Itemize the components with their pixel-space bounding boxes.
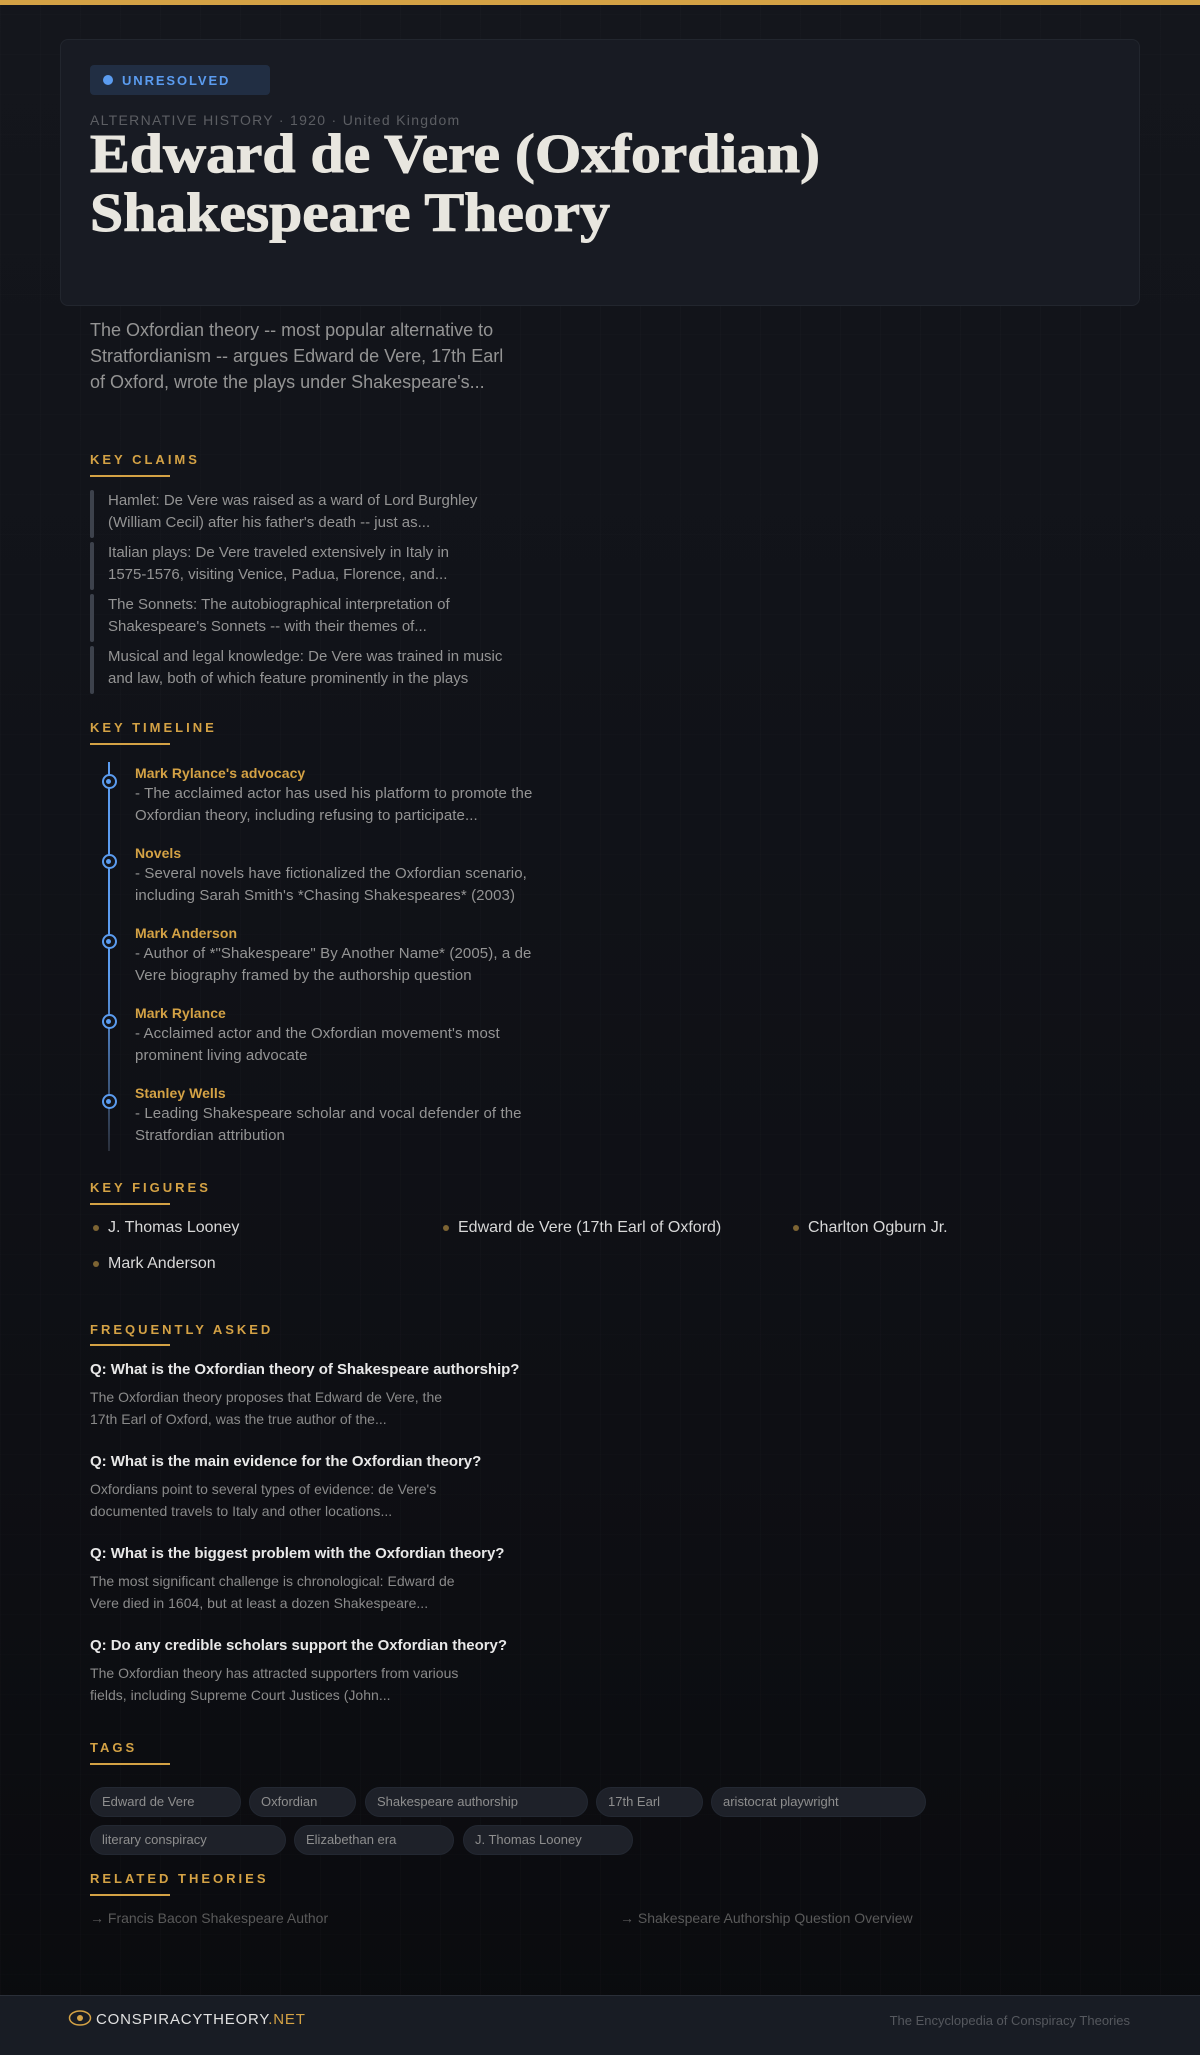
heading: key claims: KEY CLAIMS bbox=[90, 452, 200, 467]
title bbox=[90, 123, 820, 243]
summary text: Stratfordianism -- argues Edward de Vere, 17th Earl bbox=[90, 346, 503, 366]
key figures list bbox=[93, 1219, 948, 1272]
heading: frequently asked: FREQUENTLY ASKED bbox=[90, 1322, 273, 1337]
FAQ 1: The Oxfordian theory proposes that Edward de Vere, the bbox=[90, 1389, 442, 1405]
timeline node 1 bbox=[102, 774, 116, 789]
FAQ 4 bbox=[90, 1637, 507, 1703]
tag: Shakespeare authorship bbox=[377, 1794, 518, 1809]
claim: Hamlet bbox=[90, 490, 478, 538]
tag list bbox=[90, 1787, 926, 1855]
timeline axis bbox=[108, 762, 110, 1151]
timeline node 2 bbox=[102, 854, 116, 869]
badge label: UNRESOLVED bbox=[122, 73, 230, 88]
title: Edward de Vere (Oxfordian) bbox=[90, 123, 820, 184]
related link: Authorship Question: → Shakespeare Authorship Question Overview bbox=[620, 1910, 913, 1926]
footer tagline: The Encyclopedia of Conspiracy Theories bbox=[890, 2013, 1130, 2028]
badge dot bbox=[103, 75, 113, 85]
figure: Mark Anderson: Mark Anderson bbox=[108, 1255, 216, 1272]
FAQ 2: Q: What is the main evidence for the Oxfordian theory? bbox=[90, 1453, 481, 1470]
figure: Charlton Ogburn Jr.: Charlton Ogburn Jr. bbox=[808, 1219, 948, 1236]
claim: The Sonnets: Shakespeare's Sonnets -- with their themes of... bbox=[108, 618, 427, 635]
event: Stanley Wells bbox=[135, 1085, 522, 1144]
tag bbox=[463, 1825, 633, 1855]
event: Stanley Wells: Stanley Wells bbox=[135, 1085, 226, 1101]
FAQ 4: fields, including Supreme Court Justices (John... bbox=[90, 1687, 391, 1703]
event: Mark Rylance: prominent living advocate bbox=[135, 1047, 308, 1064]
claim: Musical and legal knowledge bbox=[90, 646, 502, 694]
tag: literary conspiracy bbox=[102, 1832, 207, 1847]
event: Mark Rylance's advocacy bbox=[135, 765, 532, 824]
tag bbox=[365, 1787, 588, 1817]
FAQ 3: Q: What is the biggest problem with the Oxfordian theory? bbox=[90, 1545, 504, 1562]
claim: Italian plays: 1575-1576, visiting Venice, Padua, Florence, and... bbox=[108, 566, 447, 583]
event: Mark Rylance bbox=[135, 1005, 500, 1064]
event: Mark Rylance: - Acclaimed actor and the Oxfordian movement's most bbox=[135, 1025, 500, 1042]
claim: Musical and legal knowledge: and law, both of which feature prominently in the plays bbox=[108, 670, 468, 687]
timeline bbox=[102, 762, 532, 1151]
title: Shakespeare Theory bbox=[90, 182, 610, 243]
tag bbox=[711, 1787, 926, 1817]
timeline node 3 bbox=[102, 934, 116, 949]
icon: eye logo bbox=[68, 2010, 92, 2026]
FAQ 2 bbox=[90, 1453, 481, 1519]
timeline node 5 bbox=[102, 1094, 116, 1109]
claim: The Sonnets bbox=[90, 594, 450, 642]
claim: The Sonnets: The Sonnets: The autobiographical interpretation of bbox=[108, 596, 450, 613]
FAQ 3: Vere died in 1604, but at least a dozen Shakespeare... bbox=[90, 1595, 428, 1611]
FAQ 1: Q: What is the Oxfordian theory of Shakespeare authorship? bbox=[90, 1361, 519, 1378]
footer logo text: CONSPIRACYTHEORY.NET bbox=[96, 2011, 306, 2028]
event: Mark Rylance's advocacy: - The acclaimed actor has used his platform to promote the bbox=[135, 785, 532, 802]
claim: Hamlet: Hamlet: De Vere was raised as a ward of Lord Burghley bbox=[108, 492, 477, 509]
claim: Hamlet: (William Cecil) after his father's death -- just as... bbox=[108, 514, 430, 531]
panel: key claims bbox=[90, 490, 502, 694]
FAQ 2: documented travels to Italy and other locations... bbox=[90, 1503, 392, 1519]
tag bbox=[249, 1787, 356, 1817]
tag: Edward de Vere bbox=[102, 1794, 195, 1809]
claim: Italian plays bbox=[90, 542, 449, 590]
heading: tags: TAGS bbox=[90, 1740, 137, 1755]
FAQ 4: The Oxfordian theory has attracted supporters from various bbox=[90, 1665, 458, 1681]
tag bbox=[90, 1787, 241, 1817]
summary text: The Oxfordian theory -- most popular alternative to bbox=[90, 320, 493, 340]
claim: Italian plays: Italian plays: De Vere traveled extensively in Italy in bbox=[108, 544, 449, 561]
related link: Francis Bacon: → Francis Bacon Shakespeare Author bbox=[90, 1910, 328, 1926]
claim: Musical and legal knowledge: Musical and legal knowledge: De Vere was trained in music bbox=[108, 648, 502, 665]
summary text: of Oxford, wrote the plays under Shakespeare's... bbox=[90, 372, 485, 392]
heading: related theories: RELATED THEORIES bbox=[90, 1871, 268, 1886]
tag: J. Thomas Looney bbox=[475, 1832, 582, 1847]
metadata line: ALTERNATIVE HISTORY · 1920 · United Kingdom bbox=[90, 112, 461, 128]
event: Mark Anderson: Vere biography framed by the authorship question bbox=[135, 967, 472, 984]
event: Novels: - Several novels have fictionalized the Oxfordian scenario, bbox=[135, 865, 527, 882]
event: Mark Rylance: Mark Rylance bbox=[135, 1005, 226, 1021]
tag: Oxfordian bbox=[261, 1794, 317, 1809]
FAQ 1 bbox=[90, 1361, 519, 1427]
panel: header bbox=[60, 39, 1140, 306]
figure: Edward de Vere: Edward de Vere (17th Earl of Oxford) bbox=[458, 1219, 721, 1236]
event: Mark Rylance's advocacy: Mark Rylance's advocacy bbox=[135, 765, 305, 781]
tag: Elizabethan era bbox=[306, 1832, 396, 1847]
FAQ 3 bbox=[90, 1545, 504, 1611]
event: Stanley Wells: Stratfordian attribution bbox=[135, 1127, 285, 1144]
tag bbox=[90, 1825, 286, 1855]
footer bbox=[0, 1995, 1200, 2055]
top accent bar bbox=[0, 0, 1200, 5]
event: Novels: including Sarah Smith's *Chasing Shakespeares* (2003) bbox=[135, 887, 515, 904]
heading: key timeline: KEY TIMELINE bbox=[90, 720, 217, 735]
status badge bbox=[90, 65, 270, 95]
timeline node 4 bbox=[102, 1014, 116, 1029]
event: Novels bbox=[135, 845, 527, 904]
FAQ 2: Oxfordians point to several types of evidence: de Vere's bbox=[90, 1481, 436, 1497]
event: Mark Anderson: Mark Anderson bbox=[135, 925, 237, 941]
FAQ 1: 17th Earl of Oxford, was the true author of the... bbox=[90, 1411, 387, 1427]
tag bbox=[294, 1825, 454, 1855]
event: Mark Anderson bbox=[135, 925, 531, 984]
heading: key figures: KEY FIGURES bbox=[90, 1180, 211, 1195]
event: Stanley Wells: - Leading Shakespeare scholar and vocal defender of the bbox=[135, 1105, 522, 1122]
FAQ 4: Q: Do any credible scholars support the Oxfordian theory? bbox=[90, 1637, 507, 1654]
tag: 17th Earl bbox=[608, 1794, 660, 1809]
FAQ 3: The most significant challenge is chronological: Edward de bbox=[90, 1573, 455, 1589]
tag: aristocrat playwright bbox=[723, 1794, 839, 1809]
summary text bbox=[90, 320, 503, 392]
event: Mark Anderson: - Author of *"Shakespeare" By Another Name* (2005), a de bbox=[135, 945, 531, 962]
tag bbox=[596, 1787, 703, 1817]
event: Novels: Novels bbox=[135, 845, 181, 861]
figure: J. Thomas Looney: J. Thomas Looney bbox=[108, 1219, 239, 1236]
event: Mark Rylance's advocacy: Oxfordian theory, including refusing to participate... bbox=[135, 807, 478, 824]
